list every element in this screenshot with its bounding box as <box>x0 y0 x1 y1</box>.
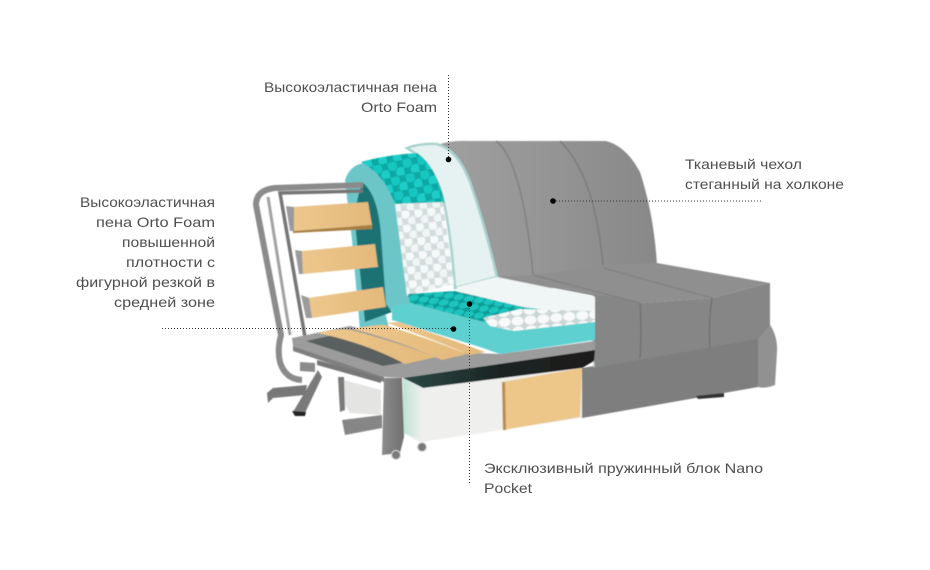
teal foam backing <box>345 163 412 352</box>
seat teal foam <box>392 303 595 354</box>
sofa base and right arm <box>582 322 777 418</box>
sofa seat cushions <box>497 263 770 368</box>
back foam pale layer <box>407 144 497 288</box>
label: fabric cover: стеганный на холконе <box>685 176 844 192</box>
seat white foam <box>457 277 595 314</box>
black drawer cavity band <box>403 350 595 389</box>
teal bubble foam back <box>361 153 445 205</box>
frame legs <box>267 360 426 460</box>
leader line: fabric cover <box>550 198 762 204</box>
sofa illustration <box>256 141 777 460</box>
label: spring block: Pocket <box>484 480 532 496</box>
label: spring block: Эксклюзивный пружинный блок Nano <box>484 460 763 476</box>
back wooden slats <box>286 202 386 318</box>
sofa backrest <box>437 141 657 290</box>
white bubble foam seat <box>483 309 595 331</box>
label: left foam: повышенной <box>122 234 215 250</box>
drawer <box>344 368 582 442</box>
leader line: left foam <box>162 326 456 332</box>
leader line: spring block <box>467 301 472 484</box>
white bubble foam back <box>395 202 454 296</box>
seat metal frame <box>292 326 595 382</box>
teal bubble foam seat <box>408 291 560 322</box>
label: fabric cover: Тканевый чехол <box>685 156 802 172</box>
label: left foam: фигурной резкой в <box>76 274 215 290</box>
label: top foam: Высокоэластичная пена <box>264 79 437 95</box>
leader line: top foam <box>446 75 451 162</box>
label: top foam: Orto Foam <box>361 99 437 115</box>
back frame <box>256 185 363 380</box>
label: left foam: плотности с <box>126 254 215 270</box>
label: left foam: пена Orto Foam <box>96 214 215 230</box>
label: left foam: Высокоэластичная <box>80 194 215 210</box>
label: left foam: средней зоне <box>114 294 215 310</box>
seat wooden slats <box>318 322 485 364</box>
